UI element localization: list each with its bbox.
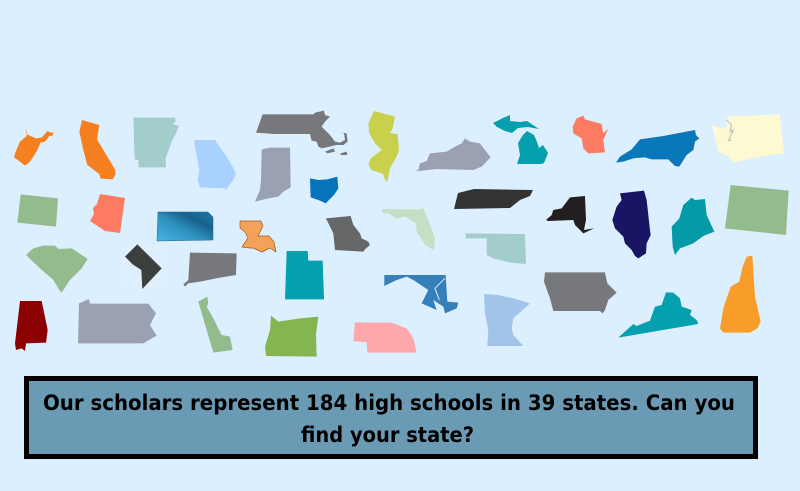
state: Florida: [382, 207, 435, 254]
state: Indiana: [255, 148, 291, 202]
state: Delaware: [198, 297, 233, 353]
state: Tennessee: [454, 189, 533, 209]
state: New Jersey: [368, 111, 399, 182]
state: Pennsylvania: [78, 299, 157, 343]
state: Ohio: [310, 177, 338, 203]
state: District of Columbia: [122, 244, 165, 289]
state: California: [79, 120, 116, 179]
state: West Virginia: [14, 125, 53, 166]
state: Kansas: [157, 212, 213, 241]
state: Oklahoma: [466, 233, 526, 264]
state: Maine: [672, 198, 714, 255]
state: Illinois: [612, 191, 651, 258]
state: Wyoming: [725, 185, 789, 235]
state: Virginia: [618, 292, 698, 338]
caption box: [26, 378, 756, 456]
state: Massachusetts: [256, 111, 348, 155]
state: Arizona: [90, 194, 125, 233]
state: Alabama: [15, 301, 48, 351]
state: Kentucky: [415, 138, 491, 171]
state: Georgia: [194, 140, 236, 191]
state: Washington: [712, 114, 784, 162]
state: Michigan: [493, 115, 548, 164]
state: South Carolina: [26, 246, 88, 293]
caption line 1: Our scholars represent 184 high schools in 39 states. Can you: [43, 391, 735, 415]
state: Wisconsin: [573, 116, 608, 153]
state: Minnesota: [484, 294, 530, 346]
state: New York: [546, 196, 594, 233]
state: New Hampshire: [720, 256, 761, 333]
state: Missouri: [326, 216, 370, 252]
state: Colorado: [17, 194, 58, 227]
caption line 2: find your state?: [301, 423, 474, 447]
state: Utah: [285, 251, 324, 299]
state: Connecticut: [183, 253, 237, 287]
state: Oregon: [265, 316, 318, 357]
state: Maryland: [384, 275, 458, 313]
state: Iowa: [544, 272, 617, 313]
state: Arkansas: [133, 118, 179, 167]
state: North Carolina: [616, 130, 699, 167]
state: Louisiana: [240, 221, 276, 252]
state: Nebraska: [353, 322, 417, 353]
